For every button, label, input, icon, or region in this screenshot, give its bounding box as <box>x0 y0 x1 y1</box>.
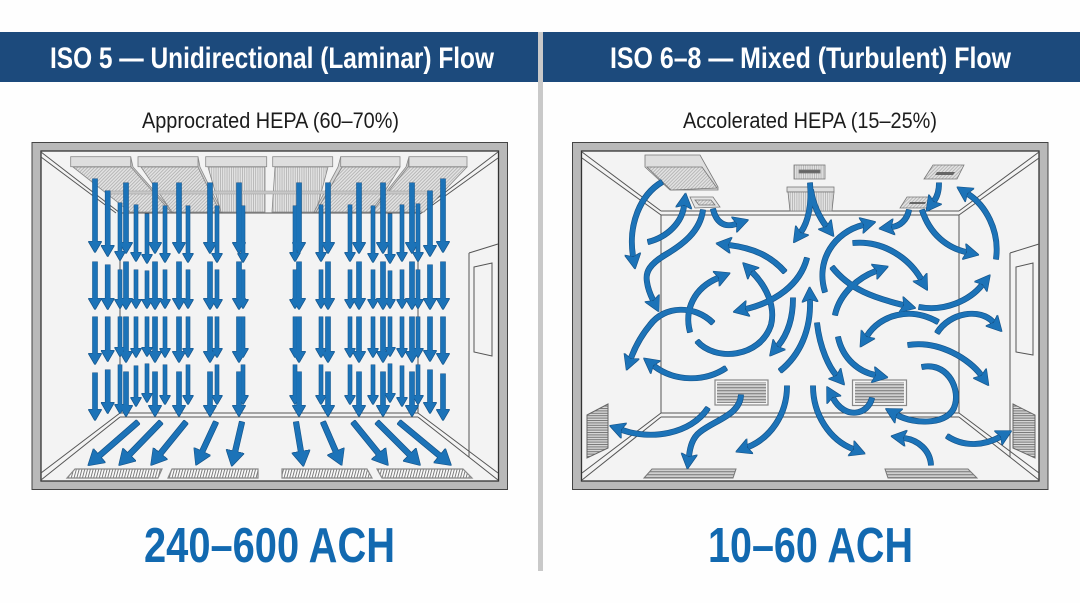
header: ISO 6-8: ISO 6–8 — Mixed (Turbulent) Flow <box>610 42 1012 75</box>
back wall return grille 2 <box>852 380 906 406</box>
arrow <box>968 194 997 259</box>
arrows: laminar downward flow, fourth row <box>95 364 443 410</box>
arrow <box>713 209 736 225</box>
arrows: laminar downward flow, third row <box>95 317 443 354</box>
back wall return grille 1 <box>715 380 768 405</box>
subheading: left HEPA coverage: Approcrated HEPA (60–70%) <box>142 108 399 133</box>
arrow <box>838 337 875 375</box>
arrow <box>811 190 826 226</box>
arrow <box>813 386 853 449</box>
arrow <box>922 210 966 252</box>
HEPA ceiling panel 5 <box>314 157 400 212</box>
arrow <box>746 258 807 309</box>
header: ISO 6-8 <box>543 32 1080 82</box>
stat: turbulent ACH: 10–60 ACH <box>708 519 913 573</box>
arrow <box>934 183 939 201</box>
arrows: laminar downward flow, second row <box>95 262 443 300</box>
arrow <box>631 310 713 358</box>
arrow <box>919 285 982 308</box>
HEPA panels cross band <box>108 191 432 194</box>
room frame <box>572 142 1048 490</box>
header: ISO 5 <box>0 32 538 82</box>
arrow <box>947 436 1000 444</box>
left wall grille <box>587 404 608 458</box>
arrows: angled flow to floor vents <box>99 422 440 456</box>
door window <box>474 263 492 356</box>
arrows: turbulent curved airflow <box>622 182 1000 465</box>
arrow <box>892 210 909 227</box>
arrow <box>632 182 662 256</box>
door window <box>1016 263 1033 355</box>
small ceiling diffuser 1 <box>690 197 720 208</box>
arrow <box>778 298 793 346</box>
center divider <box>538 32 543 571</box>
arrow <box>622 408 708 435</box>
panel: laminar flow room <box>32 142 508 490</box>
floor vent left <box>644 469 736 478</box>
arrow <box>647 210 703 300</box>
top-right ceiling diffuser <box>924 165 964 179</box>
arrow <box>853 243 921 279</box>
arrow <box>801 183 811 232</box>
arrow <box>654 366 726 378</box>
arrow <box>908 344 981 375</box>
arrow <box>648 206 684 242</box>
floor return vent 4 <box>377 469 472 478</box>
small ceiling diffuser 2 <box>900 197 931 208</box>
arrow <box>904 438 931 465</box>
arrow <box>937 314 993 333</box>
subheading: right HEPA coverage: Accolerated HEPA (15–25%) <box>683 108 937 133</box>
panel: turbulent flow room <box>572 142 1048 490</box>
arrow <box>729 245 785 272</box>
HEPA ceiling panel 4 <box>272 157 333 212</box>
HEPA ceiling panel 2 <box>138 157 222 212</box>
room perspective lines <box>582 152 1039 480</box>
arrow <box>817 323 836 375</box>
arrow <box>867 314 938 336</box>
center ceiling HEPA unit <box>787 187 834 211</box>
arrow <box>832 267 903 305</box>
floor return vent 2 <box>168 469 258 478</box>
arrow <box>689 395 741 456</box>
stat: laminar ACH: 240–600 ACH <box>144 519 395 573</box>
arrow <box>688 278 718 332</box>
arrow <box>780 300 810 371</box>
header: ISO 5: ISO 5 — Unidirectional (Laminar) Flow <box>50 42 495 75</box>
arrow <box>833 398 872 413</box>
arrow <box>897 366 956 422</box>
arrow <box>822 225 863 292</box>
room perspective lines <box>41 152 498 480</box>
arrow <box>748 386 787 447</box>
HEPA ceiling panel 3 <box>206 157 267 212</box>
floor return vent 1 <box>67 469 162 478</box>
floor return vent 3 <box>282 469 372 478</box>
arrows: laminar downward flow, top row <box>95 179 443 255</box>
right wall grille <box>1013 404 1035 458</box>
arrow <box>697 272 772 354</box>
HEPA ceiling panel 1 <box>71 157 173 212</box>
HEPA ceiling panel 6 <box>370 157 467 212</box>
center ceiling diffuser <box>794 165 825 179</box>
room frame <box>32 142 508 490</box>
arrow <box>835 271 876 315</box>
large ceiling HEPA unit <box>645 155 718 190</box>
floor vent right <box>885 469 977 478</box>
